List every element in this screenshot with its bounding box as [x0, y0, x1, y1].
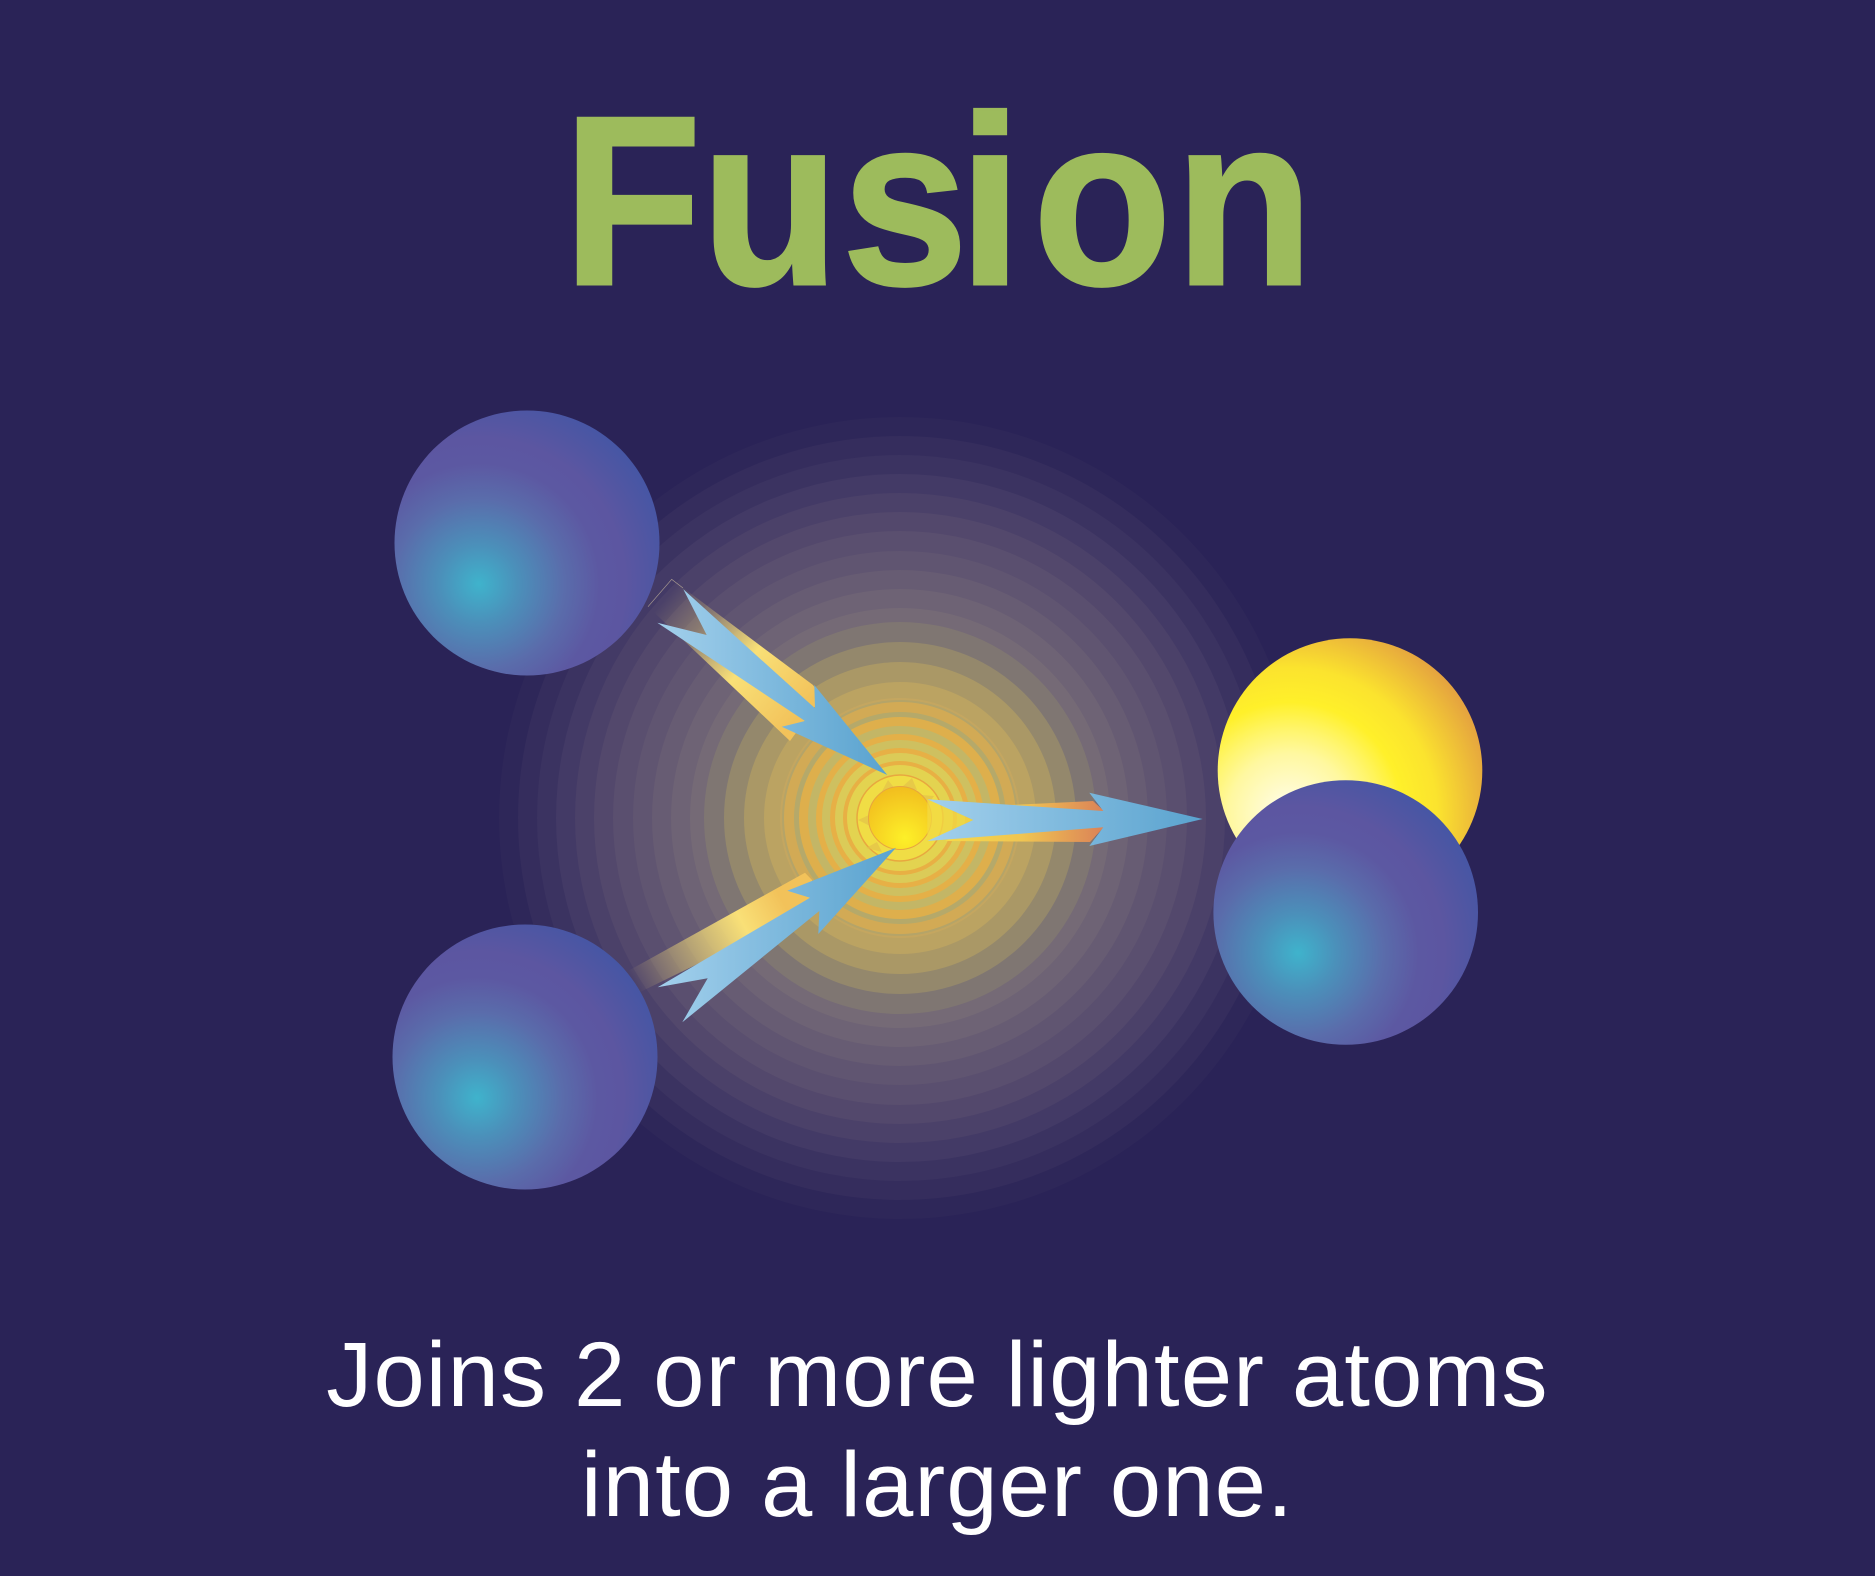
caption: Joins 2 or more lighter atoms: [326, 1324, 1549, 1426]
caption: [326, 1324, 1549, 1536]
core nucleus: [868, 786, 932, 850]
atom: bottom left: [392, 924, 658, 1190]
arrow: bottom left atom to centre: [627, 848, 896, 1022]
core rays: [858, 778, 934, 852]
title: Fusion: [563, 66, 1313, 336]
arrow: top left atom to centre: [648, 579, 887, 775]
energy glow rings: [499, 417, 1301, 1219]
arrow: centre to product: [927, 793, 1203, 846]
atom: blue product: [1213, 780, 1478, 1045]
atom: top left: [394, 410, 660, 676]
atom: yellow product: [1218, 638, 1482, 903]
caption: into a larger one.: [581, 1434, 1294, 1536]
